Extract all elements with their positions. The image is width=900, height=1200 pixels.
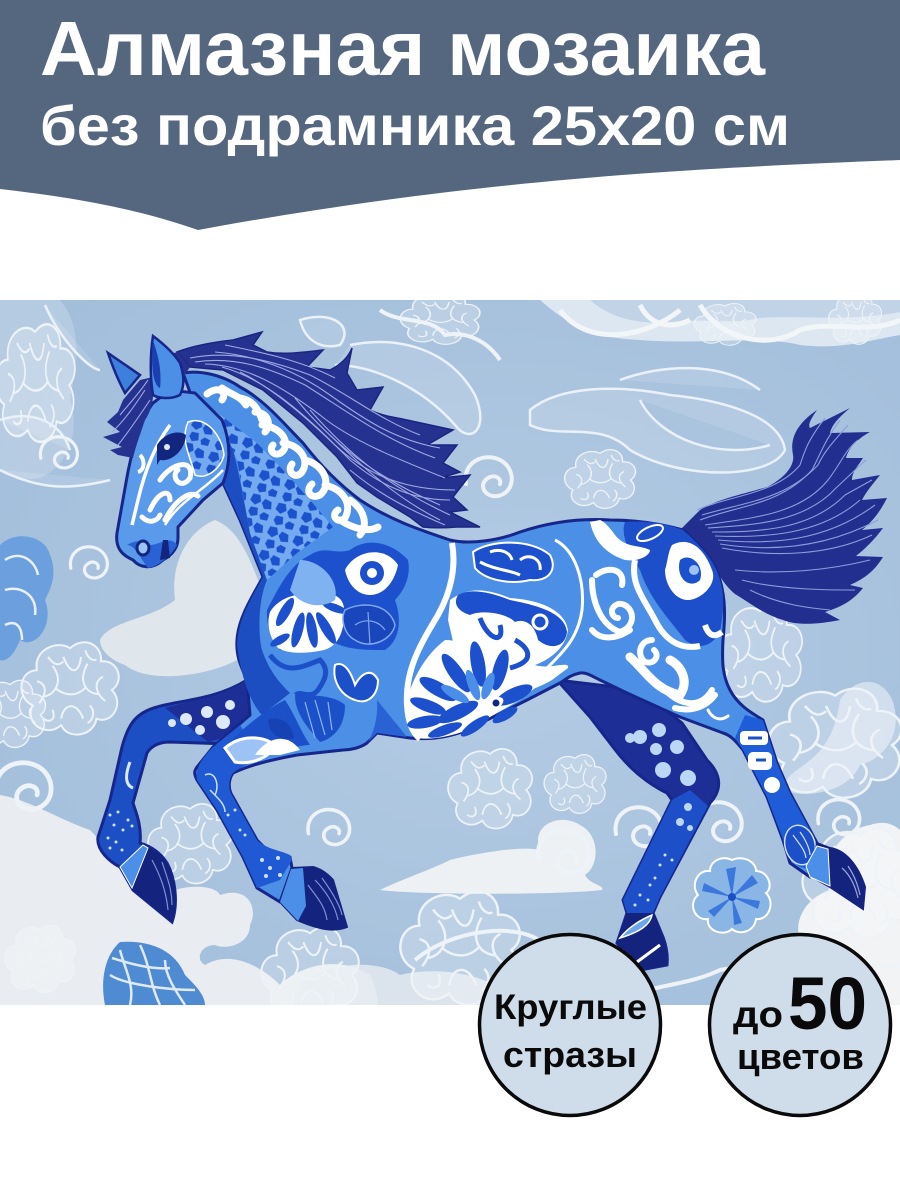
neck white scrolls [207, 388, 378, 535]
near front hoof [280, 867, 347, 930]
badge: round rhinestones: Круглые [494, 988, 647, 1027]
shoulder flower pattern [267, 543, 409, 653]
lotus flower pattern [406, 640, 545, 741]
near lower legs [197, 715, 820, 888]
header banner [0, 0, 900, 230]
background clouds and flowers [0, 294, 900, 1020]
artwork panel: horse on blue background [0, 294, 900, 1020]
mane [103, 332, 480, 528]
swirl clouds [616, 807, 662, 846]
background [0, 300, 900, 1005]
badge: round rhinestones: стразы [503, 1034, 637, 1075]
neck spot pattern [170, 393, 333, 580]
tail [680, 408, 887, 624]
outlined flourishes [0, 305, 785, 487]
badge: up to 50 colours [710, 934, 890, 1116]
far front leg [98, 680, 280, 922]
blue flower patches [103, 942, 205, 1005]
lower belly shading [368, 700, 407, 742]
near rear hoof [806, 843, 865, 909]
chest shading [223, 427, 290, 715]
subtitle: без подрамника 25х20 см [40, 94, 790, 157]
rump flower pattern [590, 520, 723, 647]
rump white scrolls [592, 570, 728, 719]
middle medallion patterns [448, 540, 583, 700]
horse [98, 332, 887, 970]
outline peonies [21, 642, 119, 735]
ears [108, 336, 183, 398]
central S line [407, 543, 453, 739]
blue peony [693, 858, 771, 933]
head [117, 390, 229, 568]
badge: up to 50 colours: до [733, 994, 783, 1035]
badge: up to 50 colours: цветов [737, 1036, 864, 1077]
badge: up to 50 colours: 50 [788, 962, 867, 1045]
horse body silhouette [183, 372, 817, 902]
lower shoulder bird pattern [222, 655, 378, 763]
badge: round rhinestones [480, 934, 660, 1116]
title: Алмазная мозаика [40, 6, 766, 92]
far rear leg [557, 680, 719, 970]
